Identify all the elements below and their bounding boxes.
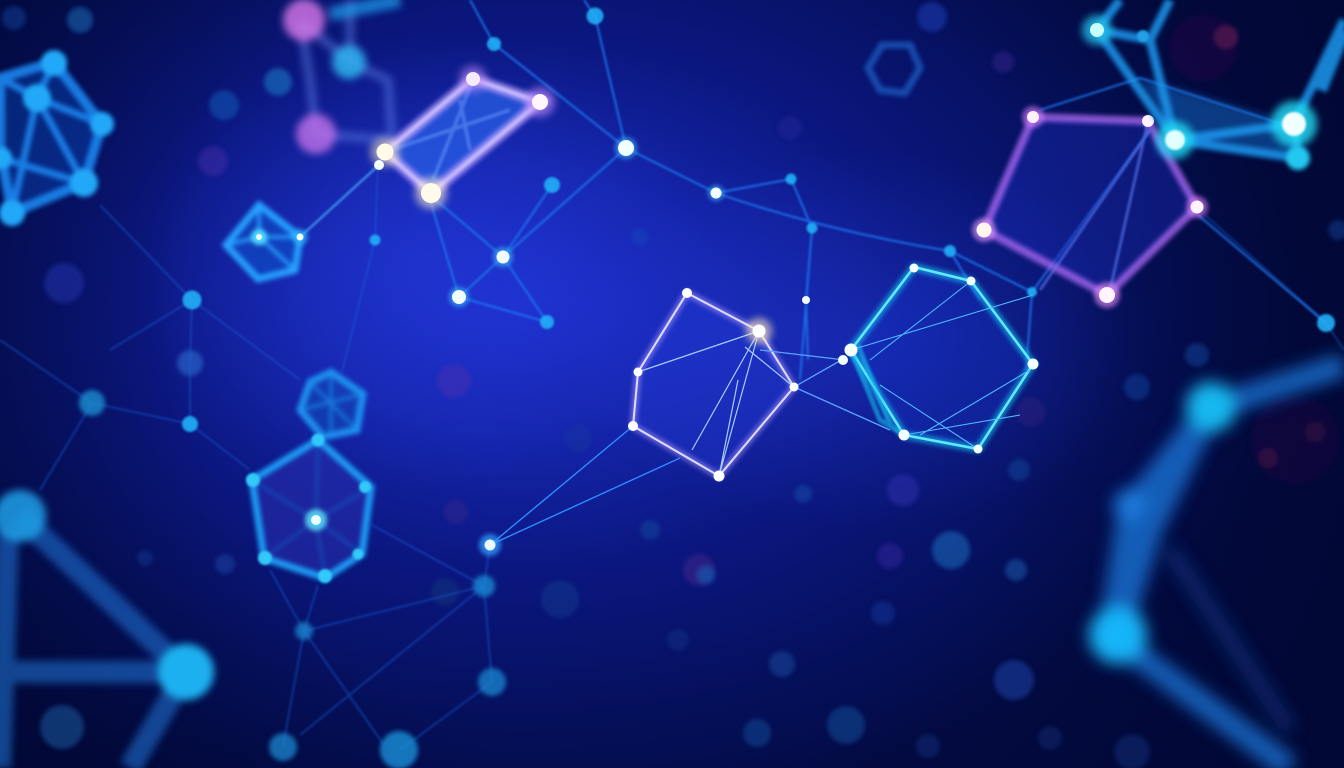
polygon: top-left blue cluster <box>0 50 114 226</box>
polygon: small hexagon left <box>226 205 308 279</box>
foreground blurred polygon: lower right <box>1089 365 1344 768</box>
polygon: top purple blurred <box>283 0 400 154</box>
polygon: central white-violet <box>479 288 890 556</box>
polygon: lower-left hexagon <box>246 434 371 583</box>
polygon: top right cyan cluster <box>1082 0 1344 170</box>
network nodes <box>79 8 1335 432</box>
small dim hexagon top <box>868 45 920 93</box>
mid network links <box>300 0 1326 380</box>
polygon: upper right purple <box>972 106 1208 308</box>
polygon: central cyan hexagon <box>838 264 1038 454</box>
dim background links <box>0 165 1344 750</box>
bokeh nodes lower <box>269 575 506 768</box>
polygon: upper white-purple quad <box>370 65 555 209</box>
foreground blurred polygon: lower left <box>0 490 214 768</box>
polygon: small hexagon mid-left <box>300 372 363 437</box>
